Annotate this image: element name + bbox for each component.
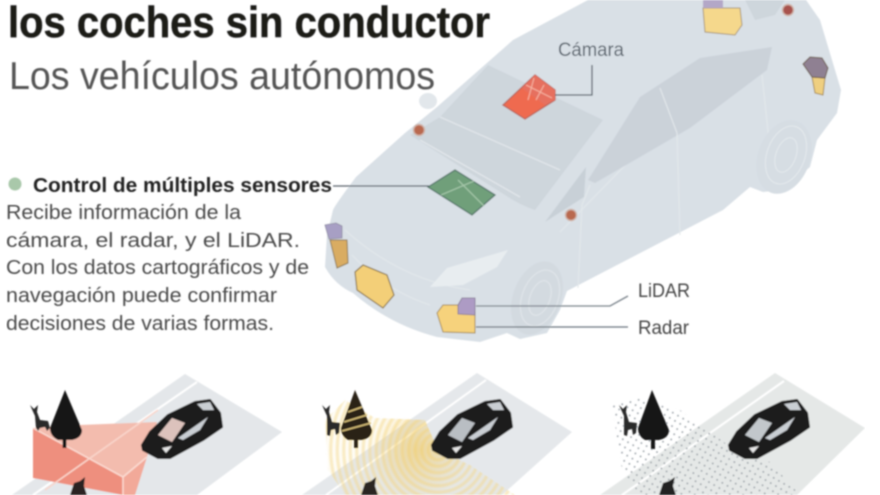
leader line: radar — [476, 326, 628, 328]
bullet — [8, 178, 22, 190]
bonnet crease — [345, 230, 470, 305]
tree wave stripes — [342, 407, 371, 431]
tree — [341, 390, 372, 448]
road centre line — [326, 380, 486, 495]
headlight — [430, 250, 508, 287]
sensor: side front lidar — [325, 223, 342, 239]
sensor: rear lidar — [703, 0, 723, 8]
panel: radar scene — [302, 373, 572, 495]
subtitle: Los vehículos autónomos — [9, 55, 435, 98]
sensor: control unit — [428, 170, 495, 215]
deer — [619, 405, 637, 436]
deer — [322, 405, 340, 436]
body text: cámara, el radar, y el LiDAR. — [6, 230, 300, 252]
sensor: front lidar — [458, 298, 475, 315]
sensor: rear radar — [703, 8, 742, 35]
rear window — [745, 0, 785, 20]
road centre line — [622, 381, 784, 495]
radar waves — [325, 400, 515, 495]
leader line: cámara — [555, 65, 592, 95]
body text: navegación puede confirmar — [6, 285, 277, 307]
camera field edges — [33, 428, 147, 495]
road — [12, 374, 282, 495]
label: LiDAR: LiDAR — [638, 281, 690, 302]
deer on road — [361, 477, 378, 495]
label: cámara: Cámara — [558, 40, 624, 61]
side windows — [588, 47, 772, 183]
camera field: left face — [33, 428, 123, 495]
tree — [50, 390, 82, 448]
road — [302, 373, 572, 495]
front wheel — [501, 254, 573, 342]
body text: Recibe información de la — [6, 202, 242, 224]
sensor: side front radar — [330, 240, 348, 268]
windshield highlight lines — [420, 117, 640, 232]
car — [432, 400, 512, 458]
leader line: LiDAR — [476, 296, 628, 306]
illustration: car with sensors — [325, 0, 841, 342]
road — [600, 373, 865, 495]
lidar points — [612, 398, 800, 495]
deer on road — [659, 477, 676, 495]
panel: camera scene — [12, 374, 282, 495]
door detail lines — [578, 75, 770, 288]
body text — [6, 202, 309, 335]
front quarter window — [545, 167, 586, 222]
deer — [30, 405, 50, 431]
deer on road — [70, 477, 87, 495]
camera field: right face — [123, 457, 147, 495]
leader line: control — [333, 185, 429, 187]
camera field: top face — [33, 422, 157, 477]
sensor: side rear radar — [812, 77, 825, 95]
windshield — [410, 65, 603, 210]
label: radar: Radar — [638, 318, 690, 339]
car body — [325, 0, 841, 342]
panel: lidar scene — [600, 373, 865, 495]
heading: control de múltiples sensores: Control de múltiples sensores — [33, 175, 332, 197]
body text: Con los datos cartográficos y de — [6, 257, 309, 279]
camera field road line — [45, 410, 158, 490]
body text: decisiones de varias formas. — [6, 313, 274, 335]
ultrasound dots — [414, 4, 794, 220]
sensor: side rear lidar — [803, 57, 828, 78]
car — [142, 400, 222, 458]
sensor: camera — [503, 75, 555, 119]
road centre line — [33, 382, 197, 495]
sensor: front bumper radar left — [355, 265, 394, 308]
car — [729, 400, 809, 458]
mirror — [419, 93, 437, 109]
sensor: front radar — [437, 305, 475, 333]
tree — [638, 390, 669, 449]
radar glow — [360, 418, 480, 495]
rear wheel — [747, 112, 821, 202]
